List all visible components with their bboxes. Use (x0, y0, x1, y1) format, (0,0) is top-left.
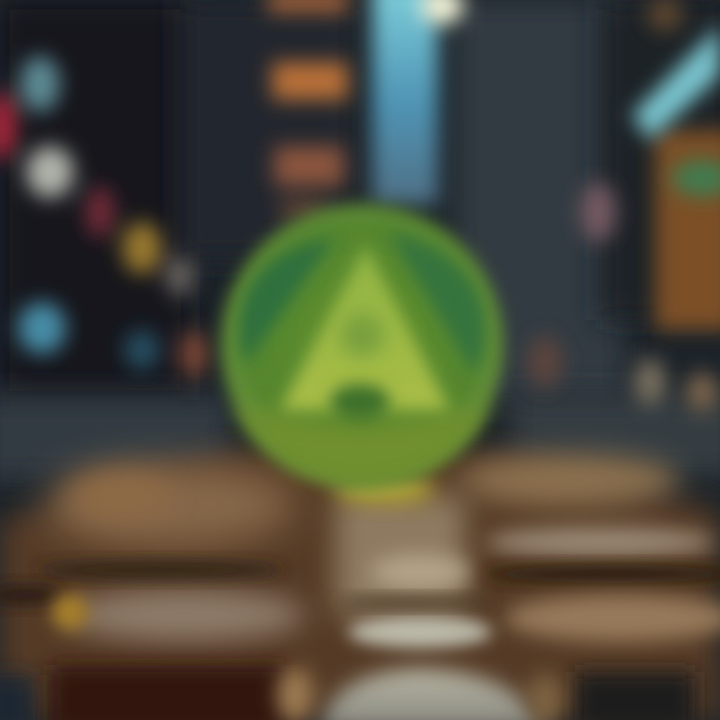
triangle notch (330, 384, 390, 420)
lower olive band (235, 405, 490, 484)
coin stack: right (460, 454, 680, 506)
icon: green sphere with triangle (221, 204, 503, 486)
light beam: sky between buildings (372, 0, 438, 205)
street lights: coloured bokeh left (0, 56, 208, 378)
yellow glow under sphere (335, 476, 435, 504)
silver base (320, 668, 545, 720)
triangle inner shade (340, 313, 384, 357)
coin stack: left (45, 463, 295, 547)
centre coin stack (335, 495, 465, 615)
sun glare (420, 0, 464, 24)
triangle (280, 245, 450, 410)
building lights: orange windows (268, 0, 348, 220)
table: wooden coin surface (0, 450, 720, 720)
dark green facet: left (240, 238, 335, 365)
right storefront: orange building with teal sign (527, 0, 720, 412)
dark green facet: right (388, 232, 485, 375)
dark base: lower left (50, 665, 290, 720)
